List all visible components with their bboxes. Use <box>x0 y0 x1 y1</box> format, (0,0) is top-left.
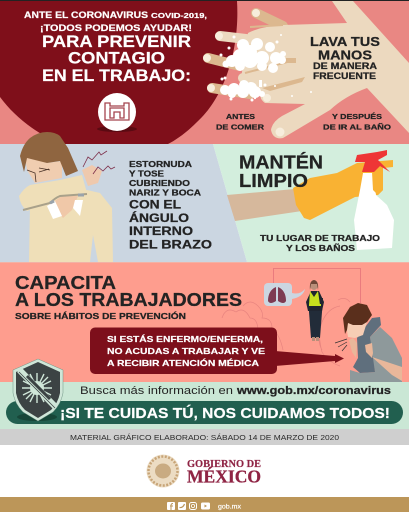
panel: train workers <box>0 263 409 383</box>
text: estornuda y tose: CON EL <box>129 198 181 212</box>
text: lava tus manos <box>310 34 380 81</box>
text: antes de comer: DE COMER <box>216 122 265 132</box>
text: y después de ir al baño <box>323 112 391 132</box>
text: estornuda y tose: ÁNGULO <box>129 210 189 225</box>
text: lugar de trabajo <box>260 234 380 253</box>
text: lava tus manos: LAVA TUS <box>310 34 380 49</box>
panel: sneeze <box>0 132 247 262</box>
panel: hand washing <box>0 1 409 144</box>
date strip: MATERIAL GRÁFICO ELABORADO: SÁBADO 14 DE MARZO DE 2020 <box>70 433 339 442</box>
heading: mantén limpio <box>239 152 323 191</box>
icon: shield with virus <box>13 359 63 421</box>
title: EN EL TRABAJO: <box>42 67 191 85</box>
slogan pill: ¡SI TE CUIDAS TÚ, NOS CUIDAMOS TODOS! <box>60 404 390 422</box>
text: website: www.gob.mx/coronavirus <box>236 385 391 397</box>
logo: Gobierno de México: MÉXICO <box>187 466 261 486</box>
icon: lungs speech bubble <box>264 283 305 306</box>
seal <box>146 454 180 488</box>
arrow <box>275 351 344 366</box>
title: PARA PREVENIR <box>42 33 191 51</box>
illustration: sick coughing person <box>335 303 402 382</box>
panel: keep clean <box>213 144 409 262</box>
heading: capacita: SOBRE HÁBITOS DE PREVENCIÓN <box>15 310 186 321</box>
social icons <box>167 502 210 510</box>
title: CONTAGIO <box>68 50 165 68</box>
text: lava tus manos: MANOS <box>318 48 372 62</box>
heading: mantén limpio: MANTÉN <box>239 152 323 172</box>
red heading shape <box>0 1 237 144</box>
screen outline <box>274 268 360 303</box>
text: y después de ir al baño: DE IR AL BAÑO <box>323 122 391 132</box>
date strip <box>0 429 409 445</box>
footer bar <box>0 497 409 512</box>
text: lugar de trabajo: TU LUGAR DE TRABAJO <box>260 234 380 243</box>
icon: workplace building <box>97 93 137 132</box>
text: estornuda y tose: Y TOSE <box>129 170 165 178</box>
text: antes de comer <box>216 112 265 132</box>
text: estornuda y tose: ESTORNUDA <box>129 160 192 169</box>
text: lava tus manos: DE MANERA <box>313 61 378 71</box>
text: website: Busca más información en <box>80 385 233 397</box>
illustration: soapy hands <box>203 1 409 138</box>
heading: mantén limpio: LIMPIO <box>239 170 308 191</box>
illustration: gloved hand with spray bottle <box>227 150 394 250</box>
text: estornuda y tose: DEL BRAZO <box>129 238 212 252</box>
text: lava tus manos: FRECUENTE <box>313 71 376 81</box>
illustration: trainer with vest <box>306 280 324 341</box>
callout: stay home if sick <box>90 328 277 374</box>
text: estornuda y tose: NARIZ Y BOCA <box>129 188 201 198</box>
callout: stay home if sick: A RECIBIR ATENCIÓN MÉDICA <box>107 357 259 368</box>
heading: capacita <box>15 273 242 321</box>
slogan pill <box>6 401 403 424</box>
callout: stay home if sick: SI ESTÁS ENFERMO/ENFERMA, <box>107 334 263 344</box>
title: ¡TODOS PODEMOS AYUDAR! <box>40 23 192 34</box>
heading: capacita: A LOS TRABAJADORES <box>15 290 242 310</box>
logo: Gobierno de México: GOBIERNO DE <box>187 458 261 470</box>
title <box>24 10 207 85</box>
audience outlines <box>222 298 350 366</box>
title: ANTE EL CORONAVIRUS <box>24 10 148 20</box>
footer bar: gob.mx <box>218 504 242 510</box>
logo: Gobierno de México <box>146 454 261 488</box>
text: y después de ir al baño: Y DESPUÉS <box>332 112 382 121</box>
panel: more info <box>0 359 409 429</box>
text: lugar de trabajo: Y LOS BAÑOS <box>286 244 356 253</box>
text: antes de comer: ANTES <box>226 112 255 121</box>
callout: stay home if sick: NO ACUDAS A TRABAJAR Y VE <box>107 346 265 356</box>
text: estornuda y tose: CUBRIENDO <box>129 179 190 188</box>
text: estornuda y tose <box>129 160 212 252</box>
title: COVID-2019, <box>151 13 207 20</box>
heading: capacita: CAPACITA <box>15 273 116 293</box>
soap foam <box>220 34 312 102</box>
text: website <box>80 385 391 397</box>
illustration: person sneezing into elbow <box>19 132 115 262</box>
text: estornuda y tose: INTERNO <box>129 224 193 238</box>
